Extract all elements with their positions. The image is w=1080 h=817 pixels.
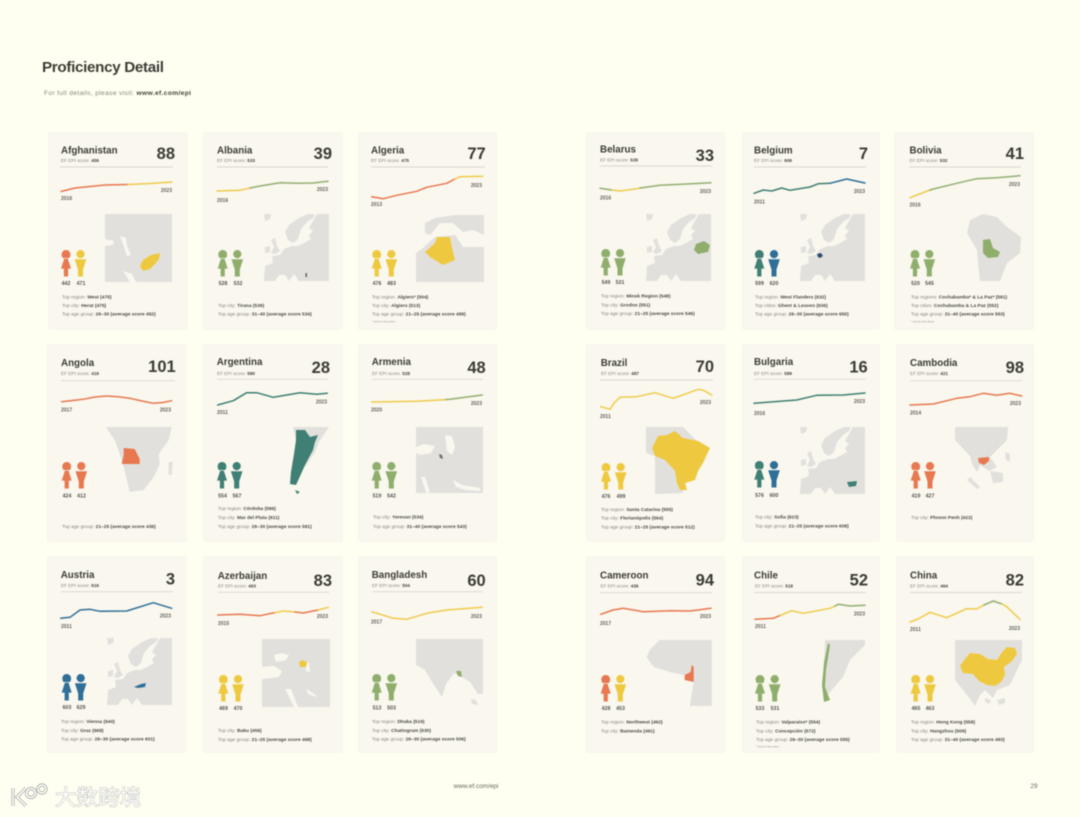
panel: Algeria — [358, 132, 497, 330]
top results: Top city: Florianópolis (564) — [601, 516, 664, 522]
top results: Top region: Valparaíso* (554) — [756, 720, 820, 726]
gender scores — [372, 462, 397, 500]
map highlight — [817, 253, 823, 258]
score: EF EPI score: 539 — [600, 158, 638, 162]
top results — [373, 514, 467, 530]
top results — [756, 720, 850, 748]
map — [646, 427, 710, 494]
trend line — [217, 181, 328, 204]
country name: Bolivia — [910, 146, 942, 156]
trend line: 2023 — [471, 614, 482, 620]
country name: Albania — [217, 146, 253, 156]
trend line: 2016 — [910, 202, 921, 208]
score: EF EPI score: 504 — [372, 583, 410, 588]
top results — [601, 720, 663, 734]
gender scores — [61, 250, 86, 287]
top results: Top region: Dhaka (519) — [372, 719, 425, 725]
panel: Brazil — [586, 344, 725, 542]
score: EF EPI score: 533 — [217, 158, 255, 163]
rank: 7 — [859, 145, 868, 163]
score: EF EPI score: 606 — [754, 158, 792, 163]
rank: 3 — [166, 570, 175, 588]
top results: Top age group: 31–40 (average score 553) — [911, 312, 1005, 318]
gender scores — [601, 249, 626, 286]
panel: Belgium — [742, 132, 880, 330]
top results: Top regions: Cochabamba* & La Paz* (561) — [911, 294, 1007, 300]
trend line: 2016 — [61, 196, 72, 202]
map — [107, 638, 172, 705]
rank: 60 — [467, 572, 486, 590]
map — [955, 427, 1010, 489]
gender scores: 476 — [602, 494, 610, 500]
map highlight — [694, 241, 710, 254]
top results: Top age group: 26–30 (average score 601) — [61, 736, 155, 742]
trend line — [754, 179, 865, 206]
trend line: 2023 — [471, 401, 482, 407]
gender scores: 465 — [912, 706, 920, 712]
trend line — [600, 183, 711, 202]
map highlight — [306, 273, 307, 277]
top results: Top age group: 31–40 (average score 543) — [373, 524, 467, 530]
gender scores: 471 — [77, 281, 85, 287]
trend line: 2023 — [316, 400, 327, 406]
rank: 94 — [696, 572, 715, 590]
gender scores — [372, 250, 397, 287]
gender scores — [601, 675, 626, 712]
rank: 52 — [850, 572, 868, 590]
map highlight — [847, 481, 857, 487]
gender scores: 542 — [387, 494, 396, 500]
trend line — [910, 393, 1022, 416]
trend line: 2023 — [317, 187, 328, 193]
country name: Brazil — [601, 358, 628, 369]
panel: Chile — [742, 556, 880, 753]
panel: Azerbaijan — [203, 556, 343, 753]
top results: Top city: Grodno (551) — [601, 302, 651, 308]
gender scores — [911, 675, 936, 712]
country name: Cameroon — [600, 570, 648, 582]
trend line: 2023 — [161, 188, 172, 194]
trend line: 2013 — [371, 202, 382, 208]
top results: Top region: Minsk Region (548) — [601, 294, 671, 300]
top results: Top city: Herat (475) — [62, 303, 107, 309]
gender scores — [218, 250, 243, 287]
gender scores: 620 — [770, 281, 778, 287]
map — [416, 215, 484, 282]
top results: * tied for first place — [911, 320, 935, 324]
trend line: 2016 — [754, 411, 765, 417]
top results — [755, 294, 849, 318]
top results — [372, 719, 466, 742]
top results: Top cities: Cochabamba & La Paz (552) — [911, 303, 999, 309]
gender scores: 533 — [756, 706, 764, 712]
top results: Top city: Bamenda (491) — [601, 728, 655, 734]
trend line: 2020 — [371, 408, 382, 414]
gender scores: 629 — [77, 705, 85, 711]
score: EF EPI score: 475 — [371, 158, 409, 163]
gender scores: 531 — [616, 280, 624, 286]
rank: 33 — [696, 147, 714, 165]
score: EF EPI score: 528 — [372, 371, 410, 376]
top results: Top city: Graz (668) — [61, 728, 104, 734]
top results: Top age group: 26–30 (average score 581) — [218, 524, 312, 530]
top results: Top region: Vienna (640) — [61, 719, 115, 725]
watermark logo — [13, 785, 46, 806]
gender scores — [217, 462, 242, 500]
panel: Cameroon — [586, 556, 725, 753]
title: Proficiency Detail — [42, 59, 164, 76]
score: EF EPI score: 580 — [217, 371, 255, 376]
rank: 39 — [314, 145, 332, 163]
trend line: 2023 — [854, 399, 865, 405]
map — [800, 214, 865, 281]
trend line: 2011 — [600, 414, 611, 420]
gender scores: 499 — [617, 494, 625, 500]
top results — [372, 294, 466, 324]
panel: Bolivia — [894, 132, 1034, 330]
gender scores: 463 — [926, 706, 934, 712]
gender scores: 600 — [770, 493, 778, 499]
rank: 77 — [467, 145, 486, 163]
panel: Albania — [203, 132, 343, 330]
top results: Top age group: 21–25 (average score 608) — [755, 524, 849, 530]
trend line: 2011 — [754, 200, 765, 206]
country name: Azerbaijan — [218, 571, 267, 582]
top results: Top region: West (475) — [62, 294, 112, 300]
top results — [755, 514, 849, 530]
gender scores: 513 — [373, 706, 381, 712]
gender scores: 599 — [755, 281, 764, 287]
gender scores — [754, 250, 780, 287]
top results — [218, 303, 312, 318]
gender scores: 503 — [387, 706, 396, 712]
top results: Top city: Algiers (513) — [372, 303, 421, 309]
gender scores: 554 — [218, 494, 227, 500]
rank: 41 — [1006, 145, 1024, 163]
trend line: 2023 — [1009, 626, 1020, 632]
top results: Top city: Yerevan (534) — [373, 514, 424, 520]
gender scores — [754, 461, 780, 499]
country name: China — [910, 570, 938, 582]
top results: Top region: Northwest (492) — [601, 720, 663, 726]
top results: Top cities: Ghent & Leuven (636) — [755, 303, 828, 309]
top results: Top region: West Flanders (632) — [755, 294, 826, 300]
trend line: 2023 — [700, 189, 711, 195]
country name: Bangladesh — [372, 570, 427, 581]
score: EF EPI score: 616 — [61, 583, 99, 588]
top results — [62, 294, 156, 318]
top results: Top city: Sofia (623) — [755, 514, 799, 520]
top results: Top region: Hong Kong (558) — [911, 720, 975, 726]
map — [416, 427, 483, 493]
trend line: 2023 — [854, 189, 865, 195]
top results: Top age group: 31–40 (average score 534) — [218, 312, 312, 318]
gender scores: 412 — [77, 494, 86, 500]
panel: Bulgaria — [742, 344, 880, 542]
country name: Austria — [61, 570, 95, 581]
gender scores: 576 — [755, 493, 764, 499]
gender scores — [62, 674, 86, 711]
trend line — [371, 395, 482, 414]
gender scores — [911, 462, 936, 500]
rank: 101 — [148, 358, 176, 376]
gender scores: 470 — [234, 706, 242, 712]
top results: Top city: Mar del Plata (611) — [218, 515, 280, 521]
top results — [601, 507, 695, 531]
score: EF EPI score: 532 — [910, 158, 948, 163]
country name: Angola — [61, 358, 95, 369]
score: EF EPI score: 518 — [755, 584, 793, 588]
country name: Cambodia — [910, 358, 958, 369]
gender scores: 476 — [373, 281, 381, 287]
gender scores: 453 — [616, 706, 625, 712]
trend line: 2014 — [910, 410, 921, 416]
map — [264, 214, 329, 281]
map — [290, 427, 329, 494]
trend line: 2011 — [910, 627, 921, 633]
top results: Top age group: 26–30 (average score 555) — [756, 737, 850, 743]
panel: Angola — [47, 344, 187, 542]
trend line: 2023 — [700, 400, 711, 406]
map — [647, 640, 712, 706]
gender scores: 427 — [926, 494, 934, 500]
trend line — [61, 396, 172, 414]
gender scores: 442 — [62, 281, 70, 287]
trend line: 2016 — [600, 196, 611, 202]
rank: 88 — [157, 145, 175, 163]
country name: Chile — [754, 570, 779, 582]
gender scores: 519 — [373, 494, 381, 500]
trend line — [600, 608, 711, 627]
gender scores: 424 — [63, 494, 71, 500]
trend line — [755, 604, 865, 630]
panel: Armenia — [358, 344, 497, 542]
trend line — [600, 389, 712, 420]
gender scores — [601, 463, 626, 500]
top results — [601, 294, 695, 317]
score: EF EPI score: 421 — [910, 371, 948, 376]
trend line — [217, 393, 327, 416]
top results: Top city: Tirana (539) — [218, 303, 265, 309]
footer url: www.ef.com/epi — [453, 783, 498, 790]
trend line: 2023 — [160, 408, 171, 414]
gender scores: 532 — [234, 281, 242, 287]
country name: Bulgaria — [754, 357, 794, 368]
rank: 70 — [696, 358, 714, 376]
rank: 48 — [467, 359, 486, 377]
top results: Top city: Chattogram (530) — [372, 728, 431, 734]
top results: Top city: Phnom Penh (422) — [911, 515, 973, 521]
trend line: 2023 — [317, 614, 328, 620]
top results — [911, 294, 1007, 324]
panel: Afghanistan — [48, 132, 188, 330]
trend line: 2017 — [600, 621, 611, 627]
country name: Afghanistan — [61, 146, 118, 156]
country name: Belarus — [600, 144, 636, 156]
top results: * tied for first place — [756, 744, 780, 748]
top results: Top age group: 21–25 (average score 546) — [601, 311, 695, 317]
trend line — [371, 176, 483, 208]
top results: Top age group: 21–25 (average score 512) — [601, 525, 695, 531]
score: EF EPI score: 436 — [600, 584, 639, 588]
top results: Top region: Algiers* (504) — [372, 294, 429, 300]
panel: Austria — [47, 556, 187, 753]
rank: 98 — [1006, 359, 1024, 377]
gender scores — [62, 462, 87, 500]
top results — [218, 506, 312, 530]
top results: * tied for first place — [372, 320, 396, 324]
gender scores: 469 — [219, 706, 228, 712]
panel: Belarus — [586, 132, 725, 330]
top results: Top age group: 26–30 (average score 650) — [755, 312, 849, 318]
panel: China — [896, 556, 1034, 753]
map — [955, 640, 1022, 706]
trend line — [754, 393, 865, 417]
rank: 28 — [312, 359, 330, 377]
trend line: 2023 — [700, 614, 711, 620]
top results: Top city: Concepción (572) — [756, 728, 816, 734]
gender scores: 549 — [602, 280, 610, 286]
top results: Top region: Córdoba (586) — [218, 506, 276, 512]
top results: Top age group: 26–30 (average score 452) — [62, 312, 156, 318]
score: EF EPI score: 463 — [218, 584, 256, 588]
map — [646, 214, 711, 281]
top results: Top city: Baku (456) — [218, 728, 262, 734]
trend line: 2023 — [1009, 182, 1020, 188]
trend line: 2023 — [471, 183, 482, 189]
top results: Top age group: 31–40 (average score 493) — [911, 737, 1005, 743]
trend line: 2017 — [371, 620, 382, 626]
score: EF EPI score: 456 — [61, 158, 99, 163]
top results: Top region: Santa Catarina (555) — [601, 507, 673, 513]
trend line: 2011 — [61, 624, 72, 630]
map highlight — [134, 683, 146, 688]
score: EF EPI score: 589 — [754, 371, 792, 376]
map — [822, 640, 865, 702]
top results — [218, 728, 312, 743]
gender scores — [755, 675, 780, 712]
watermark text: 大数跨境 — [55, 781, 141, 812]
gender scores: 567 — [233, 494, 241, 500]
trend line — [61, 182, 172, 202]
country name: Belgium — [754, 146, 793, 156]
top results — [61, 719, 155, 742]
trend line: 2011 — [755, 624, 766, 630]
trend line: 2023 — [854, 612, 865, 618]
gender scores — [372, 674, 397, 712]
map — [106, 427, 173, 492]
trend line: 2015 — [218, 621, 229, 627]
trend line — [371, 607, 482, 626]
panel: Bangladesh — [358, 556, 497, 753]
top results — [911, 720, 1005, 743]
top results: Top age group: 21–25 (average score 436) — [62, 524, 156, 530]
country name: Algeria — [371, 146, 405, 156]
top results: Top age group: 21–25 (average score 468) — [218, 737, 312, 743]
top results: Top age group: 21–25 (average score 499) — [372, 312, 466, 318]
panel: Cambodia — [896, 344, 1034, 542]
top results: Top city: Hangzhou (509) — [911, 728, 967, 734]
gender scores: 428 — [602, 706, 610, 712]
rank: 82 — [1006, 572, 1024, 590]
gender scores — [218, 675, 244, 712]
trend line: 2011 — [217, 410, 228, 416]
score: EF EPI score: 487 — [601, 371, 639, 376]
country name: Argentina — [217, 357, 263, 368]
score: EF EPI score: 464 — [910, 584, 948, 588]
gender scores: 528 — [219, 281, 227, 287]
gender scores: 483 — [387, 281, 396, 287]
gender scores: 520 — [911, 281, 920, 287]
trend line: 2017 — [61, 408, 72, 414]
top results: Top age group: 26–30 (average score 506) — [372, 736, 466, 742]
panel: Argentina — [203, 344, 343, 542]
map — [967, 214, 1021, 281]
gender scores: 419 — [912, 494, 920, 500]
map — [416, 639, 483, 705]
subtitle: For full details, please visit: www.ef.com/epi — [44, 90, 191, 97]
map — [800, 427, 865, 494]
trend line — [61, 603, 172, 630]
page number: 29 — [1030, 783, 1038, 790]
country name: Armenia — [372, 357, 411, 368]
gender scores: 545 — [925, 281, 934, 287]
gender scores: 603 — [63, 705, 71, 711]
trend line: 2023 — [160, 614, 171, 620]
map — [262, 639, 330, 707]
rank: 16 — [849, 358, 868, 376]
trend line: 2023 — [1010, 401, 1021, 407]
gender scores — [910, 250, 935, 287]
map — [105, 214, 172, 282]
trend line — [910, 176, 1020, 208]
gender scores: 531 — [771, 706, 779, 712]
score: EF EPI score: 416 — [61, 371, 99, 376]
trend line: 2016 — [217, 198, 228, 204]
trend line — [910, 601, 1020, 633]
trend line — [218, 607, 328, 627]
rank: 83 — [314, 572, 332, 590]
